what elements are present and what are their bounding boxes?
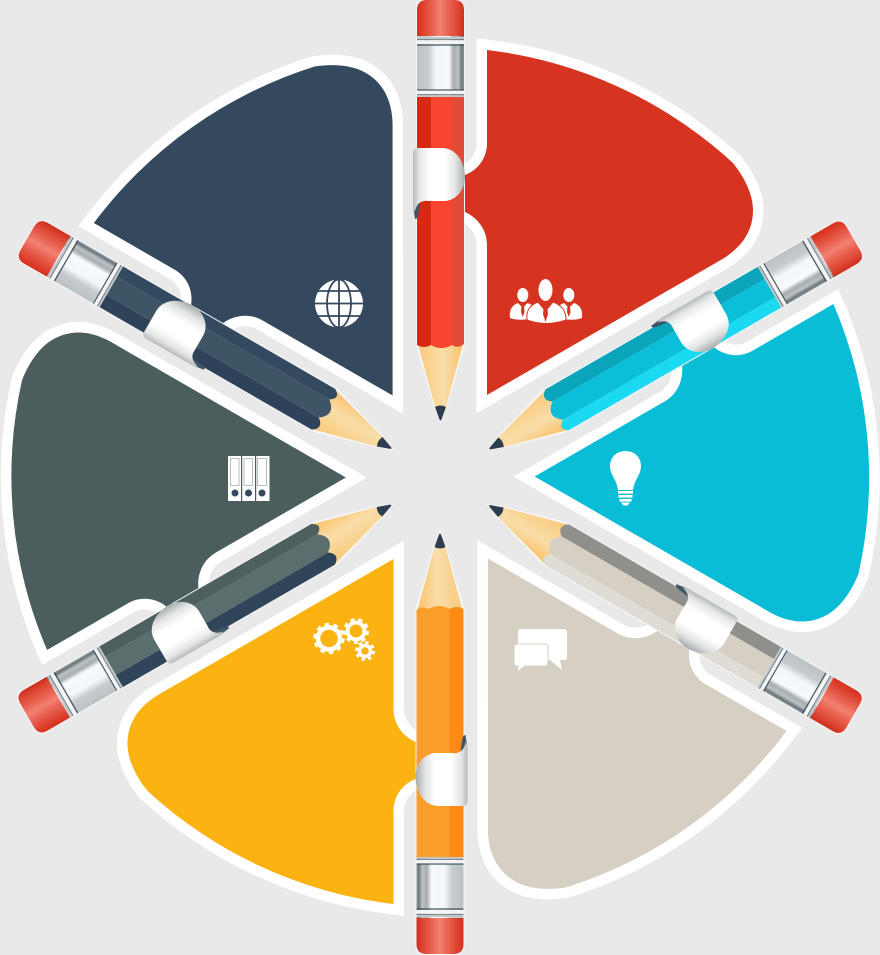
pencil: cyan: [475, 215, 866, 470]
pencil: red: [413, 0, 465, 421]
panel: cyan sector: [519, 276, 880, 707]
icon: gears: [315, 620, 374, 660]
pencil: navy: [14, 217, 404, 473]
icon: globe: [315, 280, 363, 328]
icon: light bulb: [610, 451, 641, 506]
pencil: slate: [15, 484, 405, 739]
panel: red sector: [455, 50, 753, 395]
pencil: orange: [416, 533, 468, 954]
panel: slate sector: [0, 247, 362, 678]
panel: yellow sector: [128, 559, 426, 904]
panel: beige sector: [355, 531, 803, 955]
panel: navy sector: [78, 0, 526, 423]
icon: binders: [228, 456, 270, 501]
icon: speech bubbles: [514, 629, 567, 672]
pencil: beige: [476, 481, 867, 737]
icon: people: [510, 279, 582, 324]
